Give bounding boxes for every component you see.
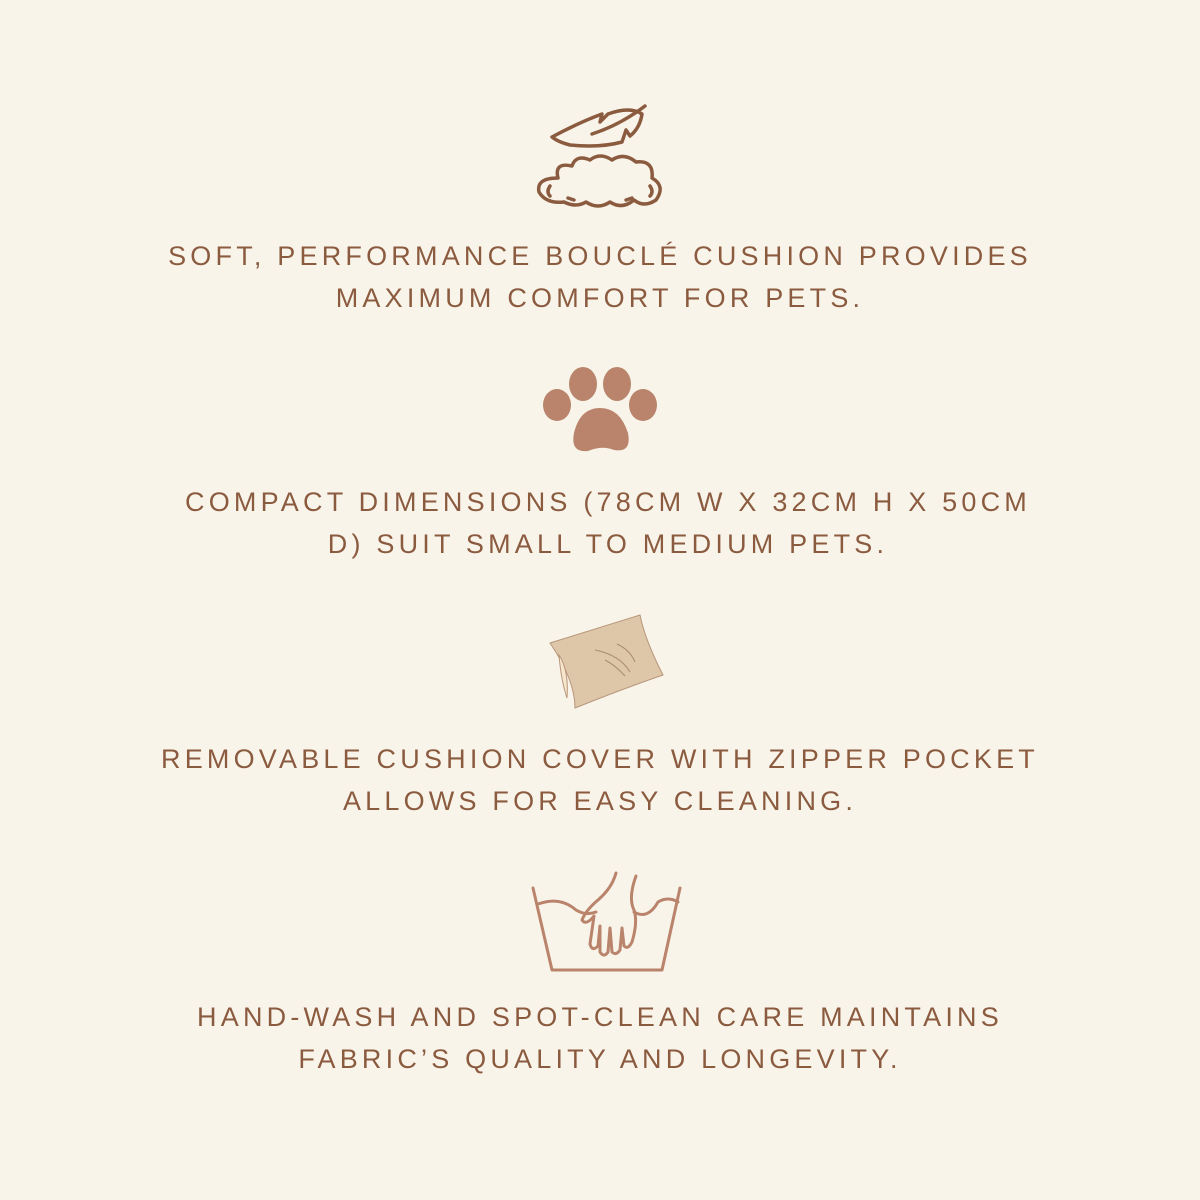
text: soft cushion: MAXIMUM COMFORT FOR PETS. xyxy=(336,283,864,313)
text: soft cushion: SOFT, PERFORMANCE BOUCLÉ CUSHION PROVIDES xyxy=(168,241,1032,271)
icon: pillow xyxy=(549,614,664,709)
text: removable cover: REMOVABLE CUSHION COVER WITH ZIPPER POCKET xyxy=(161,744,1039,774)
text: hand wash care: FABRIC’S QUALITY AND LONGEVITY. xyxy=(298,1044,902,1074)
icon: hand wash basin xyxy=(532,872,682,972)
text: compact dimensions: COMPACT DIMENSIONS (78CM W X 32CM H X 50CM xyxy=(185,487,1031,517)
text: removable cover: ALLOWS FOR EASY CLEANING. xyxy=(343,786,857,816)
icon: feather over cloud xyxy=(536,104,662,208)
text: compact dimensions: D) SUIT SMALL TO MEDIUM PETS. xyxy=(328,529,888,559)
text: removable cover xyxy=(161,744,1039,816)
icon: paw xyxy=(543,367,657,452)
text: soft cushion xyxy=(168,241,1032,313)
text: hand wash care: HAND-WASH AND SPOT-CLEAN CARE MAINTAINS xyxy=(197,1002,1003,1032)
text: compact dimensions xyxy=(185,487,1031,559)
text: hand wash care xyxy=(197,1002,1003,1074)
